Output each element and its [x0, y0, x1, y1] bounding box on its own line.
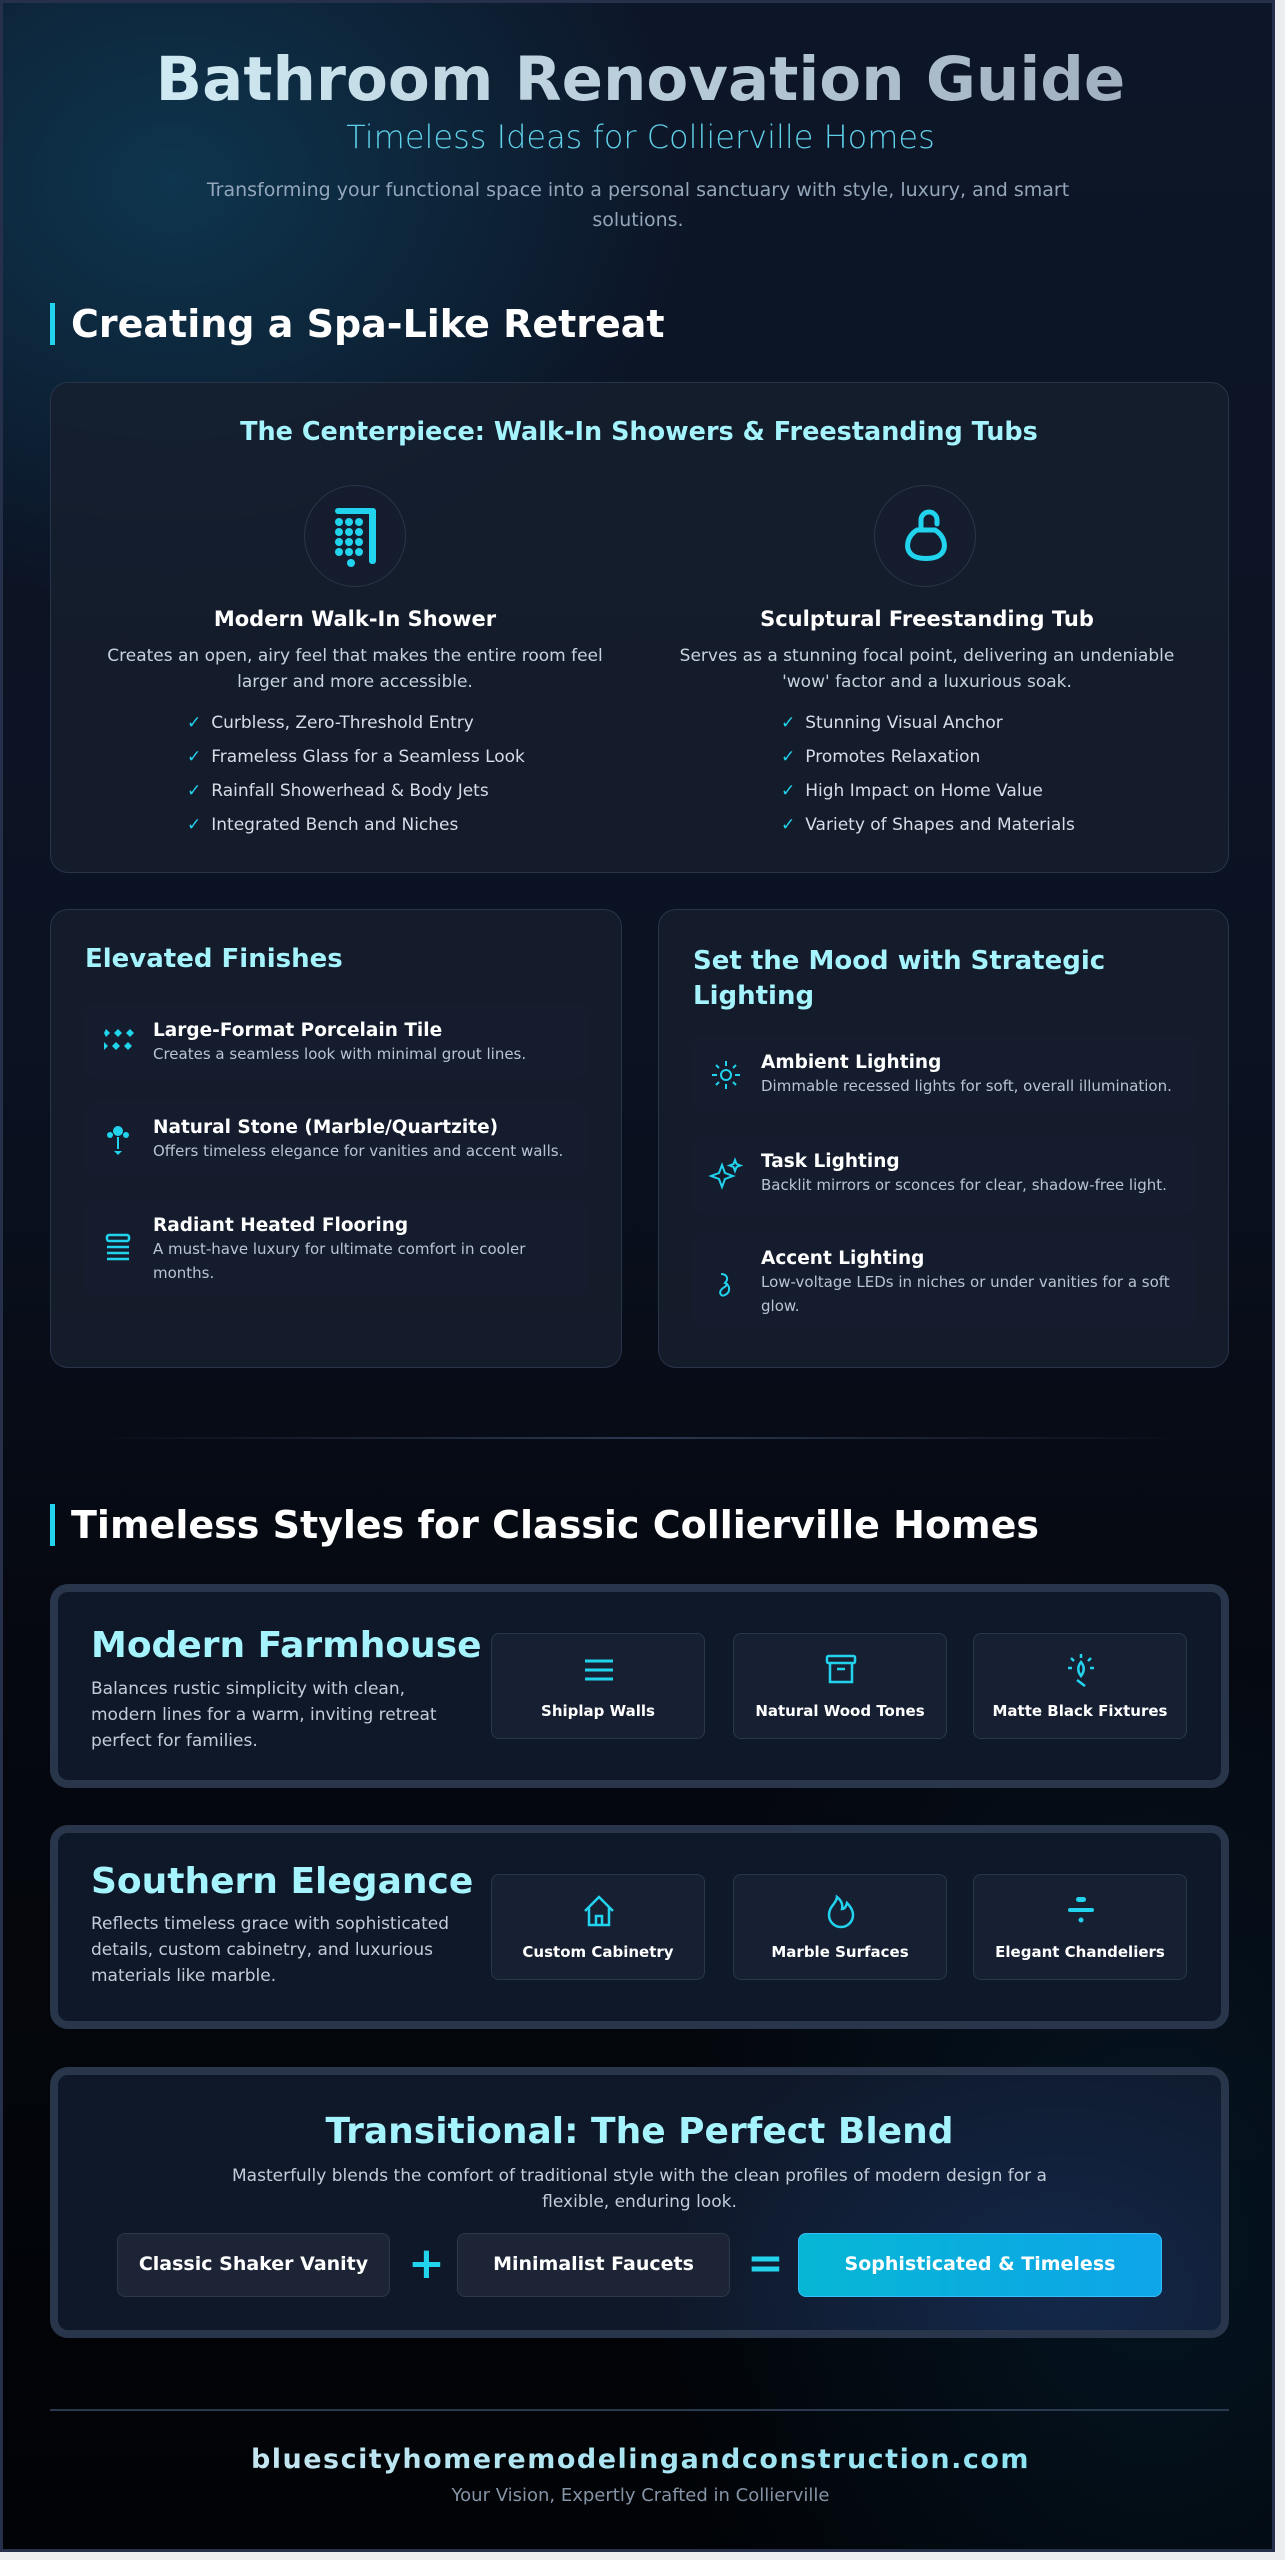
feature: shiplap [491, 1633, 705, 1739]
item: flooring: A must-have luxury for ultimate comfort in cooler months. [153, 1240, 525, 1282]
panel: modern farmhouse [50, 1584, 1229, 1788]
feature: shiplap: Shiplap Walls [541, 1702, 655, 1720]
style title: Southern Elegance [91, 1861, 473, 1902]
item: ambient: Dimmable recessed lights for soft, overall illumination. [761, 1077, 1172, 1095]
tub text: Serves as a stunning focal point, delivering an undeniable 'wow' factor and a luxurious soak. [680, 646, 1174, 692]
panel: lighting [658, 909, 1229, 1368]
item: stone: Natural Stone (Marble/Quartzite) [153, 1117, 498, 1138]
feature: chandeliers [973, 1874, 1187, 1980]
heading: timeless styles: Timeless Styles for Classic Collierville Homes [71, 1503, 1039, 1547]
feature: fixtures [973, 1633, 1187, 1739]
feature: chandeliers: Elegant Chandeliers [995, 1943, 1165, 1961]
icon: tub [874, 485, 976, 587]
icon: shower [304, 485, 406, 587]
subtitle: Timeless Ideas for Collierville Homes [346, 118, 935, 156]
feature: fixtures: Matte Black Fixtures [992, 1702, 1167, 1720]
footer url: bluescityhomeremodelingandconstruction.com [251, 2444, 1030, 2475]
feature: marble [733, 1874, 947, 1980]
style description: Reflects timeless grace with sophisticated details, custom cabinetry, and luxurious materials like marble. [91, 1914, 449, 1986]
item: accent: Accent Lighting [761, 1248, 924, 1269]
tub checklist: ✓ Stunning Visual Anchor [781, 713, 1003, 733]
item: tile: Creates a seamless look with minimal grout lines. [153, 1045, 526, 1063]
title: Bathroom Renovation Guide [156, 44, 1125, 115]
shower checklist [187, 713, 525, 835]
item: tile [85, 1004, 587, 1078]
shower text: Modern Walk-In Shower [214, 607, 496, 631]
tub checklist: ✓ Promotes Relaxation [781, 747, 980, 767]
shower text [107, 607, 603, 692]
item: flooring [85, 1199, 587, 1297]
item: stone [85, 1101, 587, 1178]
style title: Modern Farmhouse [91, 1625, 482, 1666]
footer url [3, 2444, 1278, 2475]
shower checklist: ✓ Integrated Bench and Niches [187, 815, 458, 835]
title [3, 41, 1278, 119]
equals sign: = [747, 2238, 784, 2289]
feature: cabinetry [491, 1874, 705, 1980]
item: task: Backlit mirrors or sconces for clear, shadow-free light. [761, 1176, 1167, 1194]
shower checklist: ✓ Curbless, Zero-Threshold Entry [187, 713, 474, 733]
tub checklist [781, 713, 1075, 835]
feature: cabinetry: Custom Cabinetry [522, 1943, 674, 1961]
item: ambient: Ambient Lighting [761, 1052, 941, 1073]
style description: Masterfully blends the comfort of traditional style with the clean profiles of modern design for a flexible, enduring look. [232, 2166, 1047, 2212]
panel: southern elegance [50, 1825, 1229, 2029]
style title: Transitional: The Perfect Blend [326, 2111, 953, 2152]
item: tile: Large-Format Porcelain Tile [153, 1020, 442, 1041]
item: ambient [693, 1036, 1195, 1114]
item: task [693, 1135, 1195, 1214]
equation: result [798, 2233, 1162, 2297]
panel heading: Set the Mood with Strategic Lighting [693, 946, 1105, 1011]
tub text [680, 607, 1174, 692]
equation: faucets: Minimalist Faucets [493, 2253, 694, 2275]
shower checklist: ✓ Frameless Glass for a Seamless Look [187, 747, 525, 767]
equation: shaker vanity [117, 2233, 390, 2297]
panel: elevated finishes [50, 909, 622, 1368]
panel title: The Centerpiece: Walk-In Showers & Freestanding Tubs [240, 417, 1038, 447]
feature: wood: Natural Wood Tones [755, 1702, 925, 1720]
shower text: Creates an open, airy feel that makes the entire room feel larger and more accessible. [107, 646, 603, 692]
style description: Balances rustic simplicity with clean, modern lines for a warm, inviting retreat perfect for families. [91, 1679, 437, 1751]
tub checklist: ✓ High Impact on Home Value [781, 781, 1043, 801]
feature: wood [733, 1633, 947, 1739]
feature: marble: Marble Surfaces [771, 1943, 909, 1961]
item: stone: Offers timeless elegance for vanities and accent walls. [153, 1142, 563, 1160]
footer tagline: Your Vision, Expertly Crafted in Collierville [452, 2485, 829, 2506]
heading: spa retreat: Creating a Spa-Like Retreat [71, 302, 665, 346]
equation: faucets [457, 2233, 730, 2297]
item: flooring: Radiant Heated Flooring [153, 1215, 408, 1236]
panel: centerpiece [50, 382, 1229, 873]
tub checklist: ✓ Variety of Shapes and Materials [781, 815, 1075, 835]
item: task: Task Lighting [761, 1151, 900, 1172]
plus sign: + [408, 2238, 445, 2289]
equation: shaker vanity: Classic Shaker Vanity [139, 2253, 368, 2275]
equation: result: Sophisticated & Timeless [845, 2253, 1115, 2275]
panel heading: Elevated Finishes [85, 944, 343, 974]
item: accent: Low-voltage LEDs in niches or under vanities for a soft glow. [761, 1273, 1170, 1315]
panel: transitional [50, 2067, 1229, 2338]
intro text: Transforming your functional space into a personal sanctuary with style, luxury, and smart solutions. [207, 179, 1069, 231]
tub text: Sculptural Freestanding Tub [760, 607, 1094, 631]
item: accent [693, 1232, 1195, 1330]
shower checklist: ✓ Rainfall Showerhead & Body Jets [187, 781, 489, 801]
